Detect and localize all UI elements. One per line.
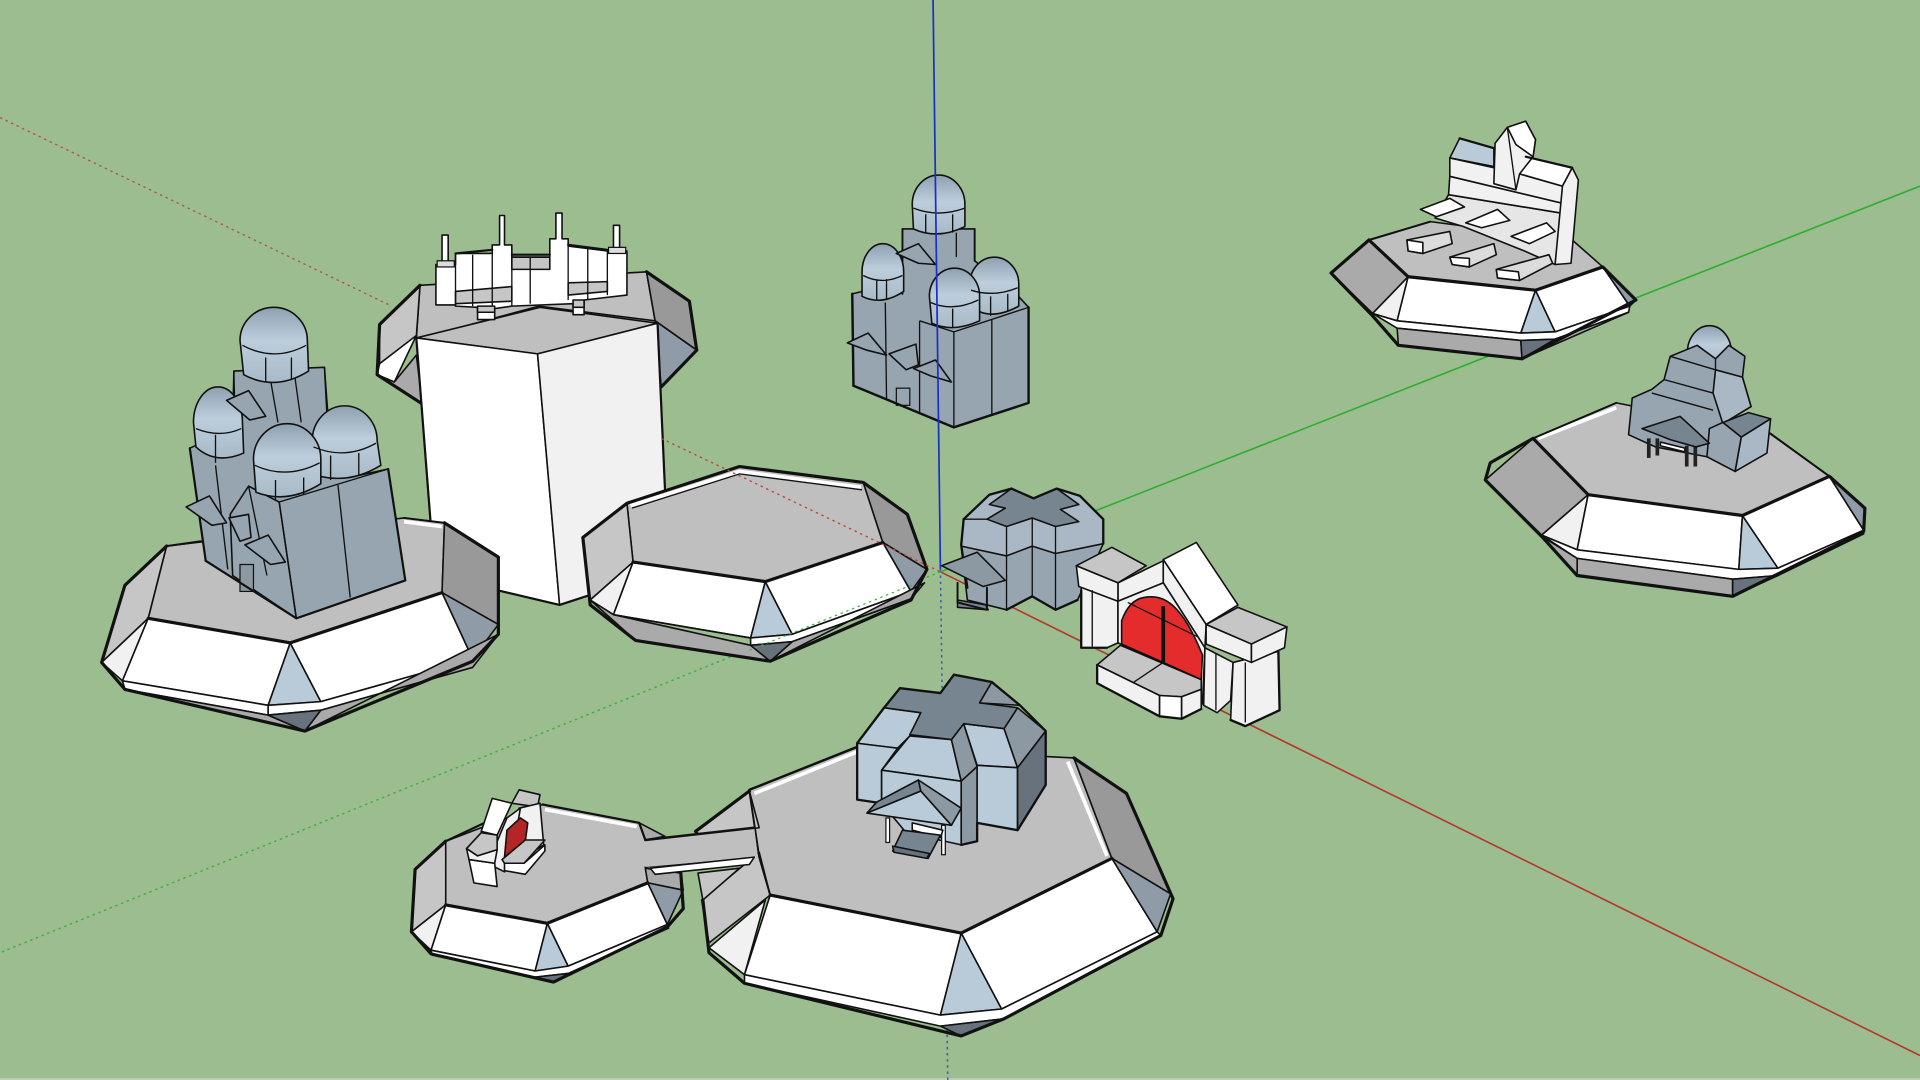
church with domes top centre (847, 175, 1029, 427)
platform left with large church (102, 518, 498, 731)
platform bottom small with shrine (411, 804, 754, 982)
tower building on right platform (1629, 326, 1771, 471)
shrine with red door on small platform (467, 790, 545, 887)
arch building with red door (1076, 542, 1287, 726)
platform centre empty (583, 467, 927, 661)
platform bottom large (696, 747, 1173, 1036)
building on bottom large platform (857, 675, 1046, 858)
axes: overlay lines on models (661, 0, 940, 650)
white cathedral on tower platform (436, 213, 627, 320)
platform top right with white cathedral (1331, 222, 1636, 359)
platform right with tower building (1485, 403, 1865, 596)
platform behind tower (377, 272, 697, 404)
church with domes on left platform (186, 307, 405, 618)
cross-shaped building in centre (942, 489, 1103, 610)
bridge between bottom platforms (645, 828, 758, 874)
white cathedral with pews (1407, 121, 1578, 280)
white tower (416, 307, 669, 605)
